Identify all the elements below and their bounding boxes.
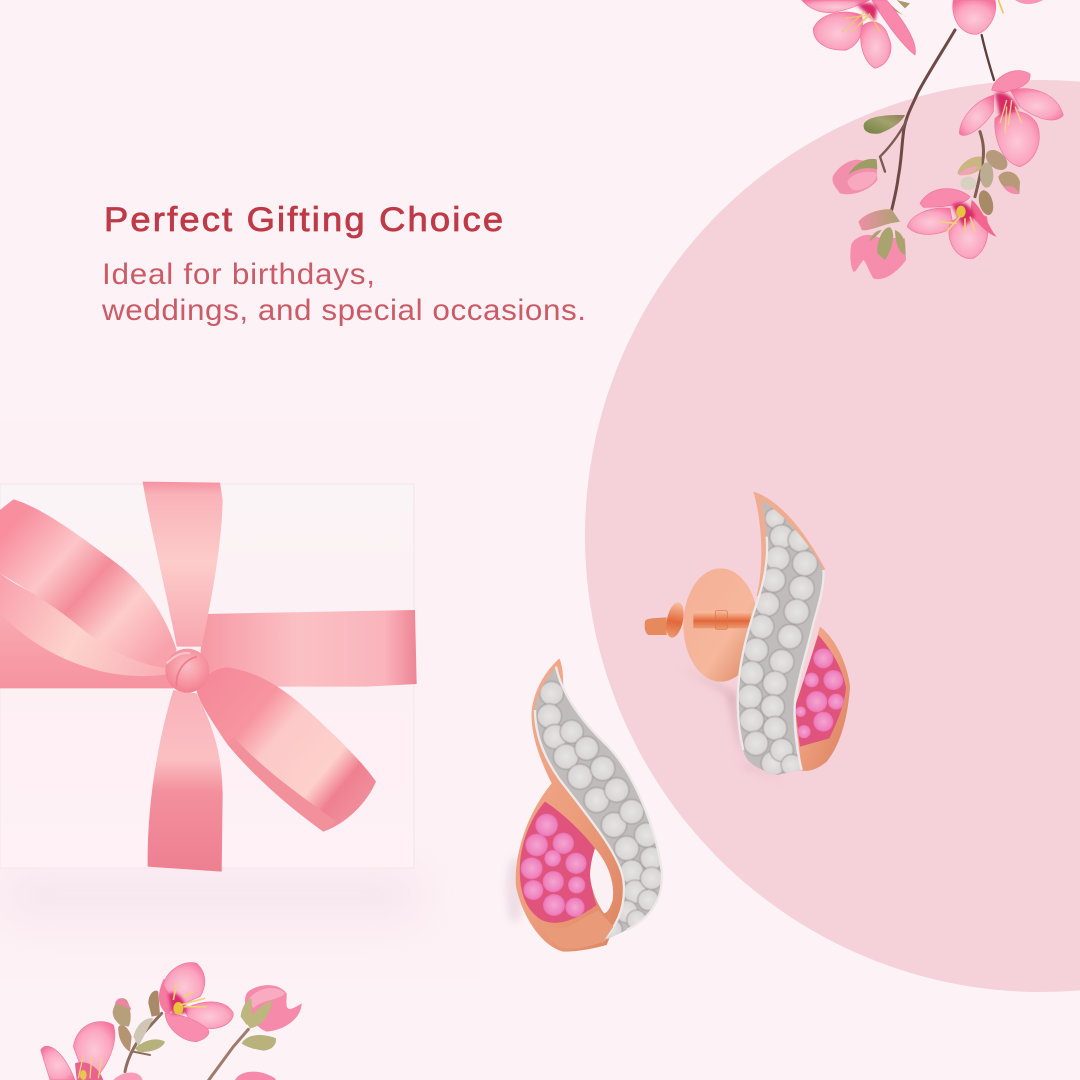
background circle panel xyxy=(585,80,1080,992)
horizontal ribbon xyxy=(187,610,417,687)
left loop outer xyxy=(0,499,177,668)
bud left xyxy=(832,159,877,194)
diamond stones xyxy=(537,681,663,941)
earrings xyxy=(506,492,850,952)
gift box with ribbon xyxy=(0,482,420,918)
branch stems xyxy=(125,1013,248,1080)
blossom top center xyxy=(953,0,1043,34)
gift box xyxy=(0,484,414,868)
blossom bottom left xyxy=(41,1022,143,1080)
knot xyxy=(165,649,209,693)
back earring xyxy=(645,492,850,782)
rose gold body xyxy=(516,658,647,952)
blossom buds cluster xyxy=(957,146,1020,217)
ribbon and bow xyxy=(0,482,417,872)
bud right xyxy=(241,985,302,1032)
leaf xyxy=(864,115,905,134)
left loop inner xyxy=(0,573,168,676)
blossom right xyxy=(959,71,1063,167)
diamond band xyxy=(535,667,662,942)
faint photo backdrop xyxy=(0,420,480,980)
screw post xyxy=(693,611,753,629)
tail underside xyxy=(227,737,337,832)
pink stones xyxy=(521,814,587,917)
bud lower small xyxy=(858,209,900,230)
screw post tip xyxy=(645,601,687,639)
rose gold teardrop xyxy=(795,627,850,771)
buds and sepals xyxy=(113,991,165,1052)
blossom main xyxy=(159,963,233,1042)
screw back disc xyxy=(683,568,758,682)
pink setting xyxy=(795,635,846,747)
blossom lower xyxy=(907,189,997,259)
bud lower xyxy=(850,227,906,279)
right tail xyxy=(197,667,376,832)
diamond stones xyxy=(738,508,818,776)
vertical ribbon top xyxy=(143,482,223,647)
title: Perfect Gifting Choice xyxy=(104,201,503,239)
earring shadow xyxy=(506,857,524,923)
branch stems xyxy=(880,30,994,210)
box shadow xyxy=(0,872,420,918)
pink stones xyxy=(795,648,844,738)
subtitle text: weddings, and special occasions. xyxy=(101,293,586,327)
blossom top left xyxy=(802,0,915,68)
pink setting xyxy=(520,802,597,923)
top cherry blossom branch xyxy=(802,0,1063,279)
bottom cherry blossom branch xyxy=(41,963,302,1080)
vertical ribbon bottom xyxy=(148,690,223,872)
bud small xyxy=(242,1035,276,1051)
gold fold xyxy=(537,910,613,949)
subtitle text: Ideal for birthdays, xyxy=(102,257,375,291)
gold tip edge xyxy=(753,492,825,597)
bud bottom xyxy=(235,1072,276,1080)
subtitle text xyxy=(101,257,586,327)
band edges xyxy=(535,667,662,942)
earring shadow xyxy=(680,667,790,782)
earring opening xyxy=(590,848,613,913)
band edges xyxy=(738,537,824,770)
front earring xyxy=(506,658,663,952)
diamond band xyxy=(738,501,824,775)
